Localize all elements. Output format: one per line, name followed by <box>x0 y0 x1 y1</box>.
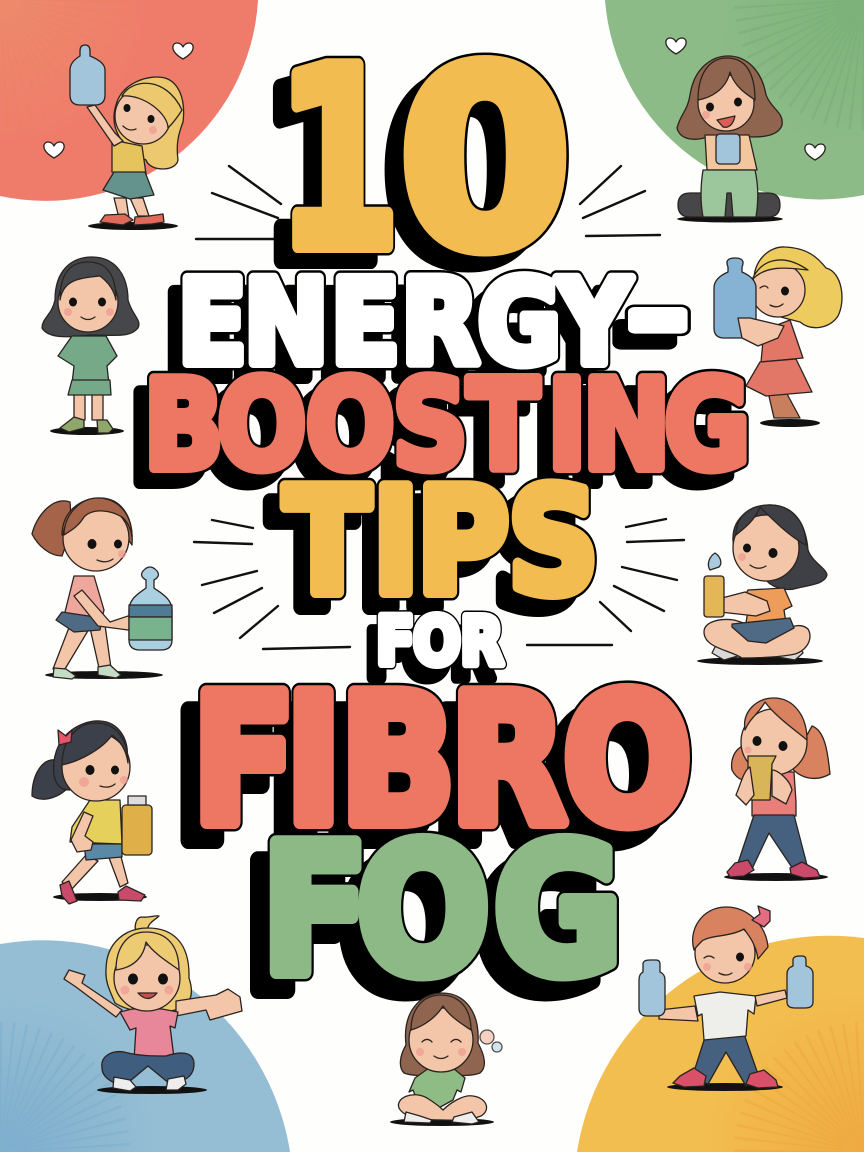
title word: FIBRO: FIBRO <box>192 657 692 864</box>
title word: ENERGY-: - <box>626 245 689 382</box>
title word: BOOSTING: BOOSTING <box>144 354 750 497</box>
heart <box>44 142 64 158</box>
title word: ENERGY-: - <box>626 245 689 382</box>
character: girl with pigtail and yellow shirt <box>32 721 152 904</box>
water bottle <box>714 258 756 338</box>
character: dark-haired girl cross-legged with can <box>697 505 827 665</box>
corner circle: coral <box>0 0 258 201</box>
heart <box>666 38 686 54</box>
title word: BOOSTING: BOOSTING <box>130 368 736 511</box>
title word: FOR: FOR <box>366 618 494 694</box>
title word: FOR: FOR <box>376 604 504 680</box>
title word: FIBRO: FIBRO <box>192 657 692 864</box>
character: blonde girl lifting bottle <box>44 43 193 230</box>
title word: FOG: FOG <box>244 824 604 1032</box>
title word: 10: 1 <box>276 15 401 305</box>
title word: 10 <box>259 15 571 319</box>
water bottle <box>787 956 813 1008</box>
character: ponytail girl with water cooler bottle <box>32 498 172 679</box>
corner circle: blue <box>0 940 290 1152</box>
heart <box>173 43 193 59</box>
title word: FOR: FOR <box>376 604 504 680</box>
character: brunette girl with cup <box>666 38 825 222</box>
title word: FIBRO: FIBRO <box>174 675 674 882</box>
title word: FOG: FOG <box>262 806 622 1014</box>
title word: 10: 1 <box>259 29 384 319</box>
title word: TIPS: TIPS <box>269 474 584 642</box>
title word: TIPS: TIPS <box>284 459 599 627</box>
title <box>130 15 750 1032</box>
title word: 10: 0 <box>399 17 571 305</box>
title word: 10: 0 <box>382 31 554 319</box>
title word: 10: 0 <box>399 17 571 305</box>
heart <box>805 144 825 160</box>
character: red-haired boy holding two bottles <box>639 906 813 1091</box>
title word: ENERGY-: ENERGY <box>178 254 633 391</box>
can <box>122 805 152 855</box>
character: brunette girl meditating <box>390 993 502 1126</box>
title word: BOOSTING: BOOSTING <box>144 354 750 497</box>
can <box>704 576 724 617</box>
title word: ENERGY-: ENERGY <box>178 254 633 391</box>
can <box>748 756 776 800</box>
corner circle: yellow <box>577 936 864 1152</box>
character: blonde girl arms open <box>64 916 242 1094</box>
rays beside TIPS <box>194 519 684 649</box>
title word: 10: 1 <box>276 15 401 305</box>
water bottle <box>129 567 172 650</box>
character: black-haired girl in green <box>42 257 139 435</box>
title word: ENERGY-: ENERGY <box>165 268 620 405</box>
water bottle <box>70 45 105 105</box>
character: red-haired girl drinking <box>724 698 830 881</box>
title word: TIPS: TIPS <box>284 459 599 627</box>
title word: FOG: FOG <box>262 806 622 1014</box>
character: blonde girl with large bottle <box>714 247 842 427</box>
corner circle: green <box>605 0 864 199</box>
title word: ENERGY-: - <box>613 259 676 396</box>
rays beside the number 10 <box>196 166 660 239</box>
water bottle <box>639 960 665 1016</box>
